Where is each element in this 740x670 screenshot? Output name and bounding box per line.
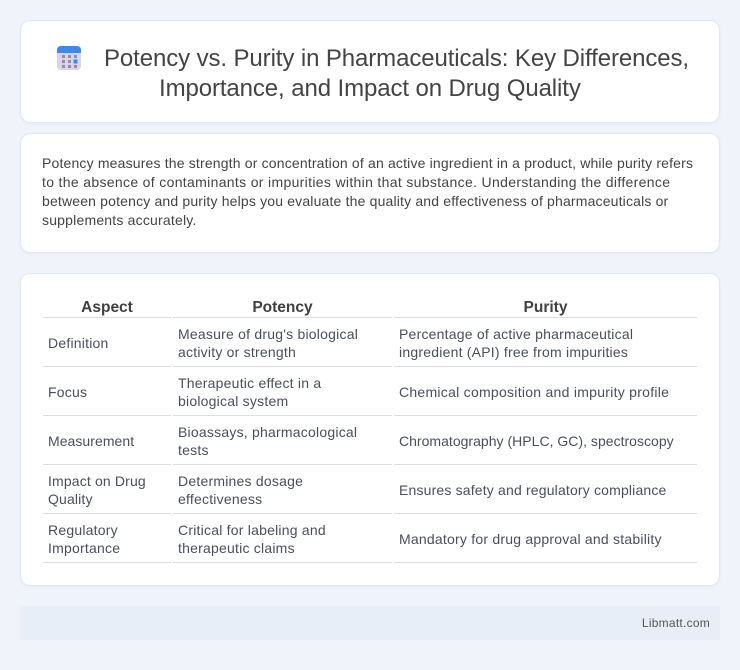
row: impact on drug quality: Quality <box>48 491 93 507</box>
panel: title card <box>20 20 720 123</box>
intro text <box>42 155 693 228</box>
comparison table: ingredient (API) free from impurities <box>399 344 628 360</box>
comparison table: biological system <box>178 393 288 409</box>
comparison table: Critical for labeling and <box>178 522 326 538</box>
table header: purity: Purity <box>524 299 567 316</box>
footer bar <box>20 606 720 640</box>
panel: introduction card <box>20 133 720 253</box>
comparison table: Ensures safety and regulatory compliance <box>399 482 666 498</box>
row: regulatory importance: Regulatory <box>48 522 118 538</box>
icon: calendar <box>57 46 81 70</box>
comparison table: Measure of drug's biological <box>178 326 358 342</box>
intro text: between potency and purity helps you evaluate the quality and effectiveness of pharmaceuticals or <box>42 193 668 209</box>
comparison table: tests <box>178 442 209 458</box>
footer credit: Libmatt.com <box>642 616 710 630</box>
title: Potency vs. Purity in Pharmaceuticals: Key Differences, <box>104 45 689 72</box>
row: impact on drug quality: Impact on Drug <box>48 473 146 489</box>
table header: aspect: Aspect <box>81 299 133 316</box>
title: Importance, and Impact on Drug Quality <box>159 75 581 102</box>
comparison table: Mandatory for drug approval and stability <box>399 531 662 547</box>
intro text: Potency measures the strength or concentration of an active ingredient in a product, while purity refers <box>42 155 693 171</box>
intro text: supplements accurately. <box>42 212 197 228</box>
comparison table: Determines dosage <box>178 473 303 489</box>
comparison table: therapeutic claims <box>178 540 295 556</box>
row: regulatory importance <box>48 522 120 556</box>
row: measurement: Measurement <box>48 433 134 449</box>
comparison table: Chromatography (HPLC, GC), spectroscopy <box>399 433 674 449</box>
panel: comparison table card <box>20 273 720 586</box>
row: focus: Focus <box>48 384 87 400</box>
comparison table: Percentage of active pharmaceutical <box>399 326 633 342</box>
title <box>104 45 689 102</box>
comparison table: activity or strength <box>178 344 296 360</box>
comparison table: Bioassays, pharmacological <box>178 424 357 440</box>
row: regulatory importance: Importance <box>48 540 120 556</box>
row: impact on drug quality <box>48 473 146 507</box>
comparison table: Therapeutic effect in a <box>178 375 321 391</box>
comparison table: effectiveness <box>178 491 262 507</box>
row: definition: Definition <box>48 335 109 351</box>
comparison table: Chemical composition and impurity profile <box>399 384 669 400</box>
intro text: to the absence of contaminants or impurities within that substance. Understanding the difference <box>42 174 670 190</box>
table header: potency: Potency <box>252 299 313 316</box>
